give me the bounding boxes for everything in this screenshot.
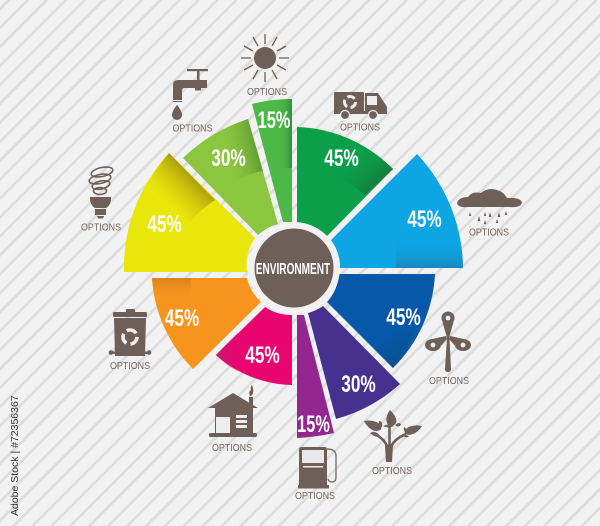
label: turbine: OPTIONS: [429, 376, 469, 387]
icon: water tap: [172, 69, 208, 120]
segment: purple 15%: 15%: [297, 411, 330, 438]
label: bulb: OPTIONS: [81, 222, 121, 234]
icon: fuel pump: [298, 447, 336, 488]
segment: dark green 45%: 45%: [324, 145, 359, 172]
segment: dark green 45%: [297, 127, 393, 236]
centre circle: ENVIRONMENT: [256, 260, 330, 278]
label: sun: OPTIONS: [247, 87, 287, 98]
icon: house: [208, 385, 258, 437]
label: cloud: OPTIONS: [469, 228, 509, 238]
icon: rain cloud: [457, 189, 522, 224]
icon: recycling truck: [334, 92, 387, 120]
label: tap: OPTIONS: [172, 124, 213, 134]
segment: blue 45%: [327, 274, 435, 368]
segment: orange 45%: [152, 278, 261, 369]
icon: sun: [241, 34, 289, 82]
icon: recycling bin: [109, 309, 151, 356]
segment: lime green 30%: 30%: [211, 145, 246, 172]
segment: orange 45%: 45%: [165, 305, 200, 332]
credit: Adobe Stock | #72356367: [9, 395, 21, 516]
segment: yellow 45%: [124, 153, 255, 272]
segment: green 15%: 15%: [258, 107, 290, 134]
segment: green 15%: [252, 99, 292, 222]
segment: yellow 45%: 45%: [147, 211, 182, 238]
label: truck: OPTIONS: [340, 122, 380, 134]
chart: environment wheel: [124, 99, 463, 438]
segment: purple 15%: [297, 315, 334, 438]
segment: magenta 45%: 45%: [245, 342, 280, 369]
icon: light bulb: [88, 165, 114, 218]
icon: wind turbine: [425, 312, 471, 372]
label: bin: OPTIONS: [110, 361, 150, 372]
label: fuel pump: OPTIONS: [295, 491, 335, 502]
label: house: OPTIONS: [212, 443, 252, 454]
label: plant: OPTIONS: [372, 466, 412, 477]
segment: indigo 30%: [308, 306, 400, 419]
segment: blue 45%: 45%: [386, 304, 421, 331]
centre circle: [248, 222, 340, 314]
segment: magenta 45%: [216, 307, 292, 385]
segment: indigo 30%: 30%: [341, 371, 376, 398]
segment: sky blue 45%: [331, 154, 463, 268]
segment: sky blue 45%: 45%: [407, 206, 442, 233]
segment: lime green 30%: [183, 119, 278, 235]
icon: plant: [364, 410, 422, 462]
